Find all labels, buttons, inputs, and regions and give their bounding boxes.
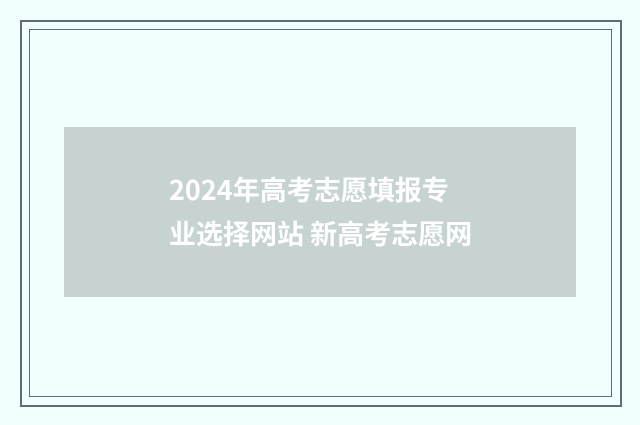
title text: 业选择网站 新高考志愿网	[169, 213, 472, 252]
title panel	[64, 127, 576, 297]
title text	[169, 169, 472, 252]
title text: 2024年高考志愿填报专	[169, 169, 449, 208]
inner frame	[29, 29, 612, 397]
